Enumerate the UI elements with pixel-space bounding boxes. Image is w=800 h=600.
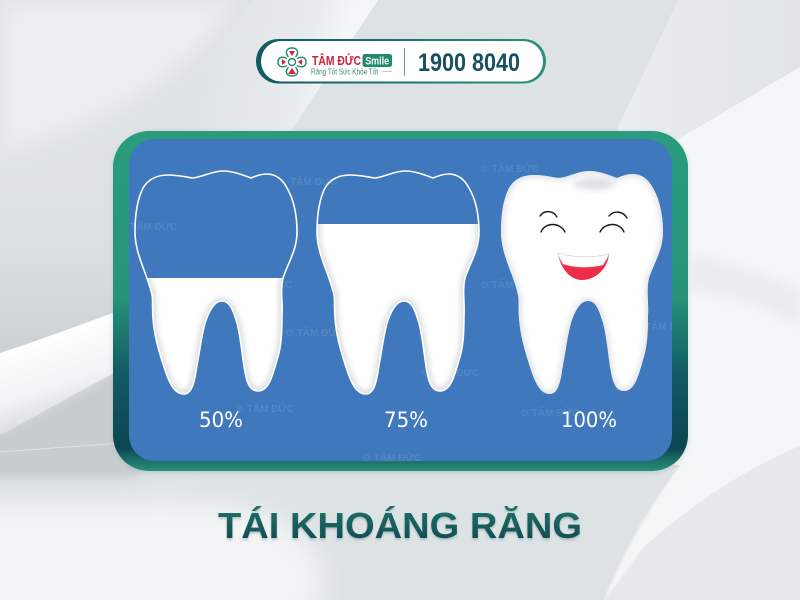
watermarks: ⚙ TÂM ĐỨC <box>362 451 421 464</box>
watermarks: ⚙ TÂM ĐỨC <box>235 402 294 415</box>
divider <box>404 48 405 76</box>
watermarks: ⚙ TÂM ĐỨC <box>520 406 579 419</box>
title: TÁI KHOÁNG RĂNG <box>218 507 582 548</box>
label: 75%: 75% <box>384 408 428 432</box>
tooth: 100% smiling <box>501 171 663 394</box>
icon: smile <box>558 253 609 280</box>
watermarks <box>130 162 692 464</box>
watermarks: TÂM ĐỨC <box>290 175 337 188</box>
label: 50%: 50% <box>199 408 243 432</box>
watermarks: ⚙ TÂM ĐỨC <box>480 162 539 175</box>
watermarks: ⚙ TÂM ĐỨC <box>420 366 479 379</box>
tooth: 75% <box>317 171 479 394</box>
logo pill <box>256 39 546 84</box>
title: TÁI KHOÁNG RĂNG <box>218 505 582 546</box>
phone number: 1900 8040 <box>418 49 520 77</box>
label: 100%: 100% <box>561 408 617 432</box>
panel: blue card with gradient frame <box>113 131 692 472</box>
watermarks: ⚙ TÂM ĐỨC <box>480 278 539 291</box>
watermarks: TÂM ĐỨC <box>245 278 292 291</box>
watermarks: TÂM ĐỨC <box>645 320 692 333</box>
badge: Smile: Smile <box>365 56 389 68</box>
tooth: 50% <box>135 171 297 394</box>
brand name: TÂM ĐỨC <box>312 53 361 68</box>
icon: eyes <box>540 212 627 232</box>
icon: clover logo <box>278 48 306 76</box>
watermarks: TÂM ĐỨC <box>130 220 177 233</box>
slogan: Răng Tốt Sức Khỏe Tốt <box>311 66 378 76</box>
watermarks: ⚙ TÂM ĐỨC <box>285 326 344 339</box>
